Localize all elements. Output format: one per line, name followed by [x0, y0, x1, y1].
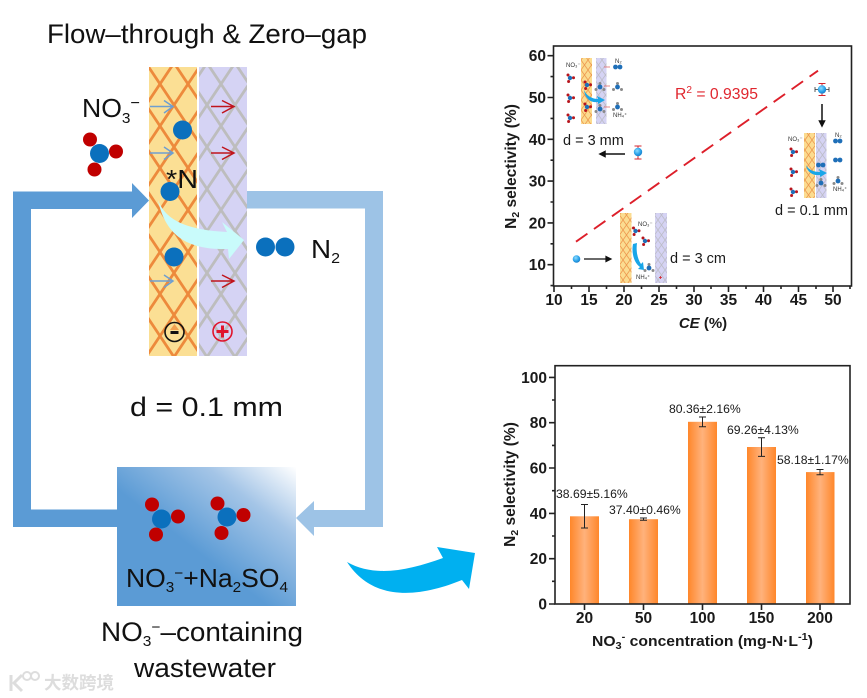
icon: N2 molecule — [256, 238, 294, 256]
label: adsorbed N: *N — [166, 164, 198, 194]
x axis labels: 40 — [755, 292, 772, 309]
y axis title: N — [502, 536, 519, 547]
label: solution composition: 2 — [233, 579, 241, 596]
y axis labels — [529, 48, 546, 274]
label: d = 3 cm: d = 3 cm — [670, 251, 726, 267]
R squared label: = 0.9395 — [692, 86, 758, 103]
y axis title: 2 — [509, 530, 521, 536]
x axis labels — [576, 610, 833, 627]
value labels: 38.69±5.16% — [556, 487, 628, 501]
arrow to d = 0.1 mm inset — [820, 104, 824, 126]
x axis title: concentration (mg-N·L — [625, 633, 798, 650]
error bars — [581, 417, 824, 528]
red flow arrows through anode — [211, 100, 234, 288]
scatter chart: N2 selectivity vs CE — [503, 46, 852, 332]
title: Flow–through & Zero–gap — [47, 19, 367, 49]
y axis labels: 80 — [530, 415, 547, 432]
anode plus sign — [213, 322, 232, 341]
label: solution composition: SO — [241, 563, 279, 593]
reservoir box — [117, 467, 296, 606]
caption: wastewater: NO — [101, 617, 142, 647]
label: solution composition: 4 — [279, 579, 288, 596]
x axis title: NO — [592, 633, 614, 650]
watermark — [11, 672, 114, 693]
label: electrode distance: d = 0.1 mm — [130, 392, 283, 422]
x axis title: 3 — [616, 640, 622, 652]
y axis labels: 40 — [530, 506, 547, 523]
y axis labels: 10 — [529, 257, 546, 274]
inset: d = 3 mm schematic — [566, 58, 627, 124]
inset: d = 0.1 mm schematic: NH₄⁺ — [833, 186, 847, 193]
R squared label: R — [675, 86, 686, 103]
caption: wastewater: − — [151, 619, 161, 636]
data point: d = 0.1 mm — [815, 84, 829, 96]
y axis title: 2 — [510, 212, 522, 218]
value labels: 58.18±1.17% — [777, 453, 849, 467]
x axis title: -1 — [798, 631, 808, 643]
x axis labels: 100 — [690, 610, 715, 627]
x axis labels: 15 — [580, 292, 598, 309]
value labels: 69.26±4.13% — [727, 423, 799, 437]
x axis labels: 10 — [545, 292, 563, 309]
inset: d = 3 cm schematic: NH₄⁺ — [636, 274, 650, 281]
label: solution composition: NO — [126, 563, 165, 593]
arrow to d = 3 cm inset — [584, 256, 611, 262]
y axis labels: 20 — [530, 551, 547, 568]
flow loop: feed pipe from reservoir to cathode — [13, 183, 149, 527]
y axis labels: 40 — [529, 132, 546, 149]
caption: wastewater: –containing — [160, 617, 303, 647]
inset: d = 0.1 mm schematic: NO₃⁻ — [788, 137, 803, 143]
cathode mesh — [149, 67, 197, 356]
inset: d = 3 mm schematic: N₂ — [615, 59, 622, 65]
x axis ticks — [584, 604, 820, 610]
label: solution composition: +Na — [183, 563, 233, 593]
electrode cell — [149, 67, 247, 356]
y axis ticks — [549, 377, 555, 604]
y axis labels: 20 — [529, 216, 546, 232]
data point: d = 3 mm — [634, 146, 642, 159]
inset: d = 0.1 mm schematic — [788, 133, 847, 198]
x axis labels: 25 — [650, 292, 668, 309]
x axis labels: 20 — [615, 292, 633, 309]
y axis title: selectivity (%) — [502, 422, 519, 530]
x axis title: CE (%) — [679, 315, 727, 332]
plot frame — [555, 366, 850, 604]
bars — [570, 422, 834, 604]
R squared label: 2 — [686, 85, 692, 96]
caption: wastewater — [101, 617, 303, 683]
y axis labels: 100 — [521, 370, 547, 387]
arrow to d = 3 mm inset — [600, 152, 625, 156]
y axis title: N — [503, 218, 520, 229]
x axis title: ) — [808, 633, 813, 650]
label: NO3-: 3 — [122, 110, 130, 127]
x axis labels: 50 — [635, 610, 652, 627]
icon: nitrate molecule left — [145, 498, 185, 542]
x axis labels: 200 — [807, 610, 833, 627]
x axis title: - — [622, 631, 626, 643]
label: solution composition: 3 — [166, 579, 174, 596]
caption: wastewater: 3 — [143, 633, 151, 650]
y axis labels: 60 — [529, 48, 546, 65]
flow loop: return pipe from anode to reservoir — [247, 191, 383, 536]
icon: nitrate molecule right — [210, 496, 250, 540]
x axis labels — [545, 292, 842, 309]
inset: d = 3 cm schematic: NO₃⁻ — [638, 222, 653, 228]
data point: d = 3 cm — [573, 255, 580, 263]
label: N2: N — [311, 234, 330, 264]
icon: nitrate molecule — [83, 132, 123, 176]
label: solution composition: − — [174, 565, 183, 582]
y axis title: selectivity (%) — [503, 104, 520, 212]
value labels: 37.40±0.46% — [609, 503, 681, 517]
x axis labels: 20 — [576, 610, 593, 627]
value labels: 80.36±2.16% — [669, 402, 741, 416]
x axis labels: 35 — [720, 292, 737, 309]
y axis labels: 60 — [530, 460, 547, 478]
fit line — [576, 71, 818, 242]
label: NO3-: NO — [82, 93, 121, 123]
label: d = 0.1 mm: d = 0.1 mm — [775, 203, 848, 219]
inset: d = 3 mm schematic: NH₄⁺ — [613, 112, 627, 119]
plot frame — [554, 46, 852, 286]
label: NO3-: − — [130, 95, 140, 112]
caption: wastewater: wastewater — [133, 653, 276, 683]
y axis labels: 50 — [529, 90, 546, 107]
x axis ticks — [554, 286, 850, 292]
blue flow arrows through cathode — [150, 100, 173, 288]
value labels — [556, 402, 849, 517]
y axis labels: 30 — [529, 174, 546, 190]
x axis labels: 45 — [790, 292, 807, 309]
inset: d = 0.1 mm schematic: N₂ — [835, 133, 842, 139]
inset: d = 3 mm schematic: NO₃⁻ — [566, 63, 581, 69]
big curved arrow — [347, 547, 475, 593]
adsorbed nitrogen atoms — [160, 120, 192, 266]
y axis ticks — [548, 56, 554, 286]
watermark: 大数跨境 — [44, 673, 114, 693]
y axis labels: 0 — [538, 596, 547, 614]
x axis labels: 30 — [685, 292, 703, 309]
label: d = 3 mm: d = 3 mm — [563, 133, 624, 149]
bar chart: N2 selectivity vs NO3 concentration — [502, 366, 850, 652]
y axis labels — [521, 370, 547, 614]
swoosh arrow to N2 — [158, 200, 244, 259]
x axis labels: 150 — [749, 610, 774, 627]
cathode minus sign — [165, 322, 184, 342]
label: N2: 2 — [331, 250, 340, 267]
x axis labels: 50 — [824, 292, 842, 309]
inset: d = 3 cm schematic — [620, 213, 667, 283]
anode mesh — [199, 67, 247, 356]
